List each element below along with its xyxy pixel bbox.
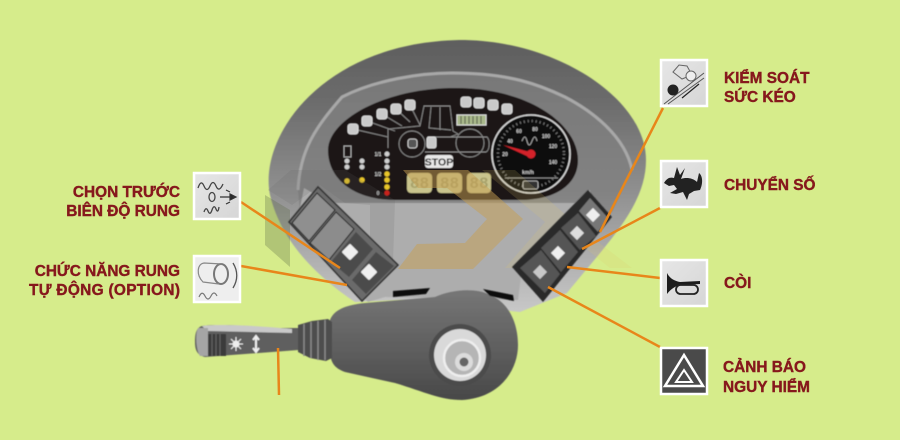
icon: rabbit gear shift (661, 161, 707, 207)
lever end ring (429, 324, 491, 386)
icon: hazard warning (661, 348, 707, 394)
label: automatic vibration: TỰ ĐỘNG (OPTION) (29, 281, 180, 299)
label: traction control: KIỂM SOÁT (724, 69, 810, 87)
digital readouts: 88 (410, 175, 429, 193)
indicator lights: 1/2 (375, 172, 382, 178)
icon: amplitude preselect (194, 173, 240, 219)
indicator lights (344, 146, 390, 197)
button icon (361, 264, 377, 280)
battery gauge (457, 115, 486, 125)
label: hazard warning: NGUY HIỂM (723, 378, 810, 396)
speedometer (492, 115, 570, 193)
lever body (330, 290, 518, 400)
machine outline (353, 105, 489, 157)
icon: traction control (661, 60, 707, 106)
right switch cluster (512, 190, 612, 302)
control panel housing (269, 40, 646, 312)
button icon (586, 208, 600, 222)
digital readouts (407, 173, 491, 193)
watermark logo (265, 170, 632, 269)
label: amplitude preselect (66, 183, 180, 220)
label: hazard warning: CẢNH BÁO (723, 359, 806, 376)
icon: automatic vibration (194, 256, 240, 302)
lower panel of housing (296, 188, 590, 302)
label: traction control (724, 69, 810, 106)
speedometer: 140 (549, 160, 557, 166)
speedometer: 20 (502, 152, 508, 158)
left switch cluster (289, 187, 398, 301)
label: hazard warning (723, 359, 810, 396)
label: amplitude preselect: CHỌN TRƯỚC (73, 183, 180, 201)
button icon (570, 226, 584, 240)
icon: horn (661, 260, 707, 306)
speedometer: 120 (549, 144, 557, 150)
button icon (551, 246, 565, 260)
digital readouts: 88 (469, 175, 489, 193)
speedometer: 60 (516, 129, 522, 135)
label: horn: CÒI (724, 274, 751, 292)
lever symbols (232, 340, 240, 348)
speedometer: 40 (507, 139, 513, 145)
indicator lights: 0 (377, 191, 380, 197)
lever stalk (195, 288, 518, 400)
speedometer: km/h (522, 170, 534, 176)
button icon (533, 265, 547, 279)
lever arm (195, 325, 298, 357)
button icon (342, 244, 358, 260)
callout lines (241, 108, 663, 395)
label: automatic vibration: CHỨC NĂNG RUNG (35, 262, 180, 280)
speedometer: 100 (542, 134, 550, 140)
slot (393, 288, 514, 301)
rubber boot (298, 319, 332, 361)
label: amplitude preselect: BIÊN ĐỘ RUNG (66, 202, 180, 220)
display (328, 88, 578, 200)
label: automatic vibration (29, 262, 180, 299)
label: traction control: SỨC KÉO (724, 88, 796, 106)
speedometer: 80 (532, 127, 538, 133)
indicator lights: 1/1 (375, 152, 382, 158)
label: gear shift: CHUYỂN SỐ (724, 176, 816, 194)
status icons (348, 97, 512, 148)
digital readouts: 88 (440, 175, 459, 193)
STOP sign: STOP (425, 156, 453, 168)
